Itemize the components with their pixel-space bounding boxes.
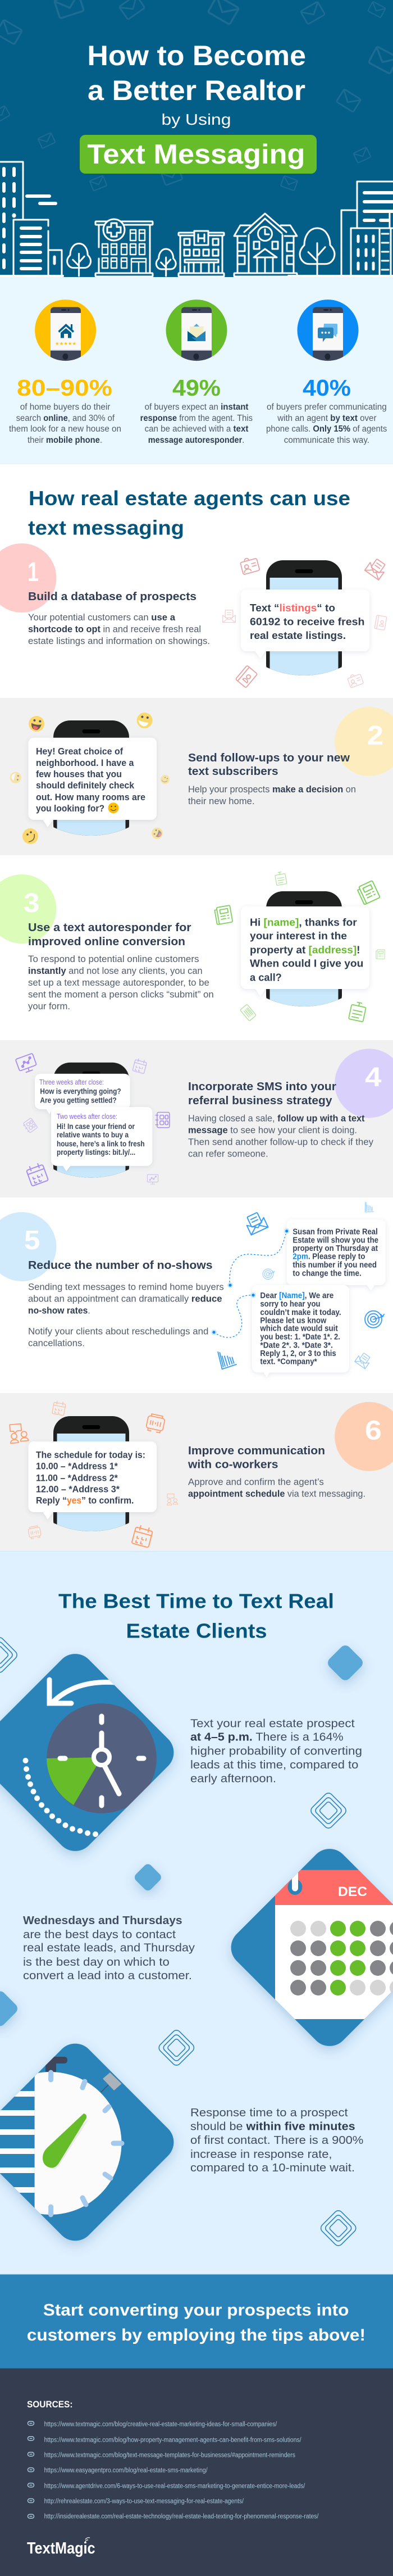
text: best hour [190, 1717, 362, 1785]
phone with message 2: few houses that you [36, 769, 122, 779]
calendar diamond: DEC [338, 1884, 367, 1899]
calendar day dots [290, 1921, 393, 1996]
text: best days: convert a lead into a customer. [23, 1969, 192, 1982]
stat 2: message autoresponder. [148, 436, 244, 445]
message bubble B: which date would suit [259, 1325, 338, 1334]
text block 1: Build a database of prospects [28, 590, 196, 603]
number badge 3: 3 [24, 888, 39, 918]
text block 5: Notify your clients about reschedulings and [28, 1327, 208, 1337]
panel: section 4 referral [0, 1040, 393, 1198]
icon: phone with envelope [166, 300, 227, 361]
phone with message 1 [241, 560, 369, 682]
phone with message 2: neighborhood. I have a [36, 758, 134, 768]
text: best days [23, 1914, 195, 1982]
phone with message 6: 10.00 – *Address 1* [36, 1461, 118, 1471]
text: best hour: leads at this time, compared to [190, 1758, 358, 1771]
text block 4: referral business strategy [188, 1094, 332, 1107]
phone with two messages: relative wants to buy a [57, 1131, 129, 1139]
phone with two messages: How is everything going? [40, 1087, 121, 1096]
stat 3: with an agent by text over [277, 414, 376, 423]
heading: how agents can use texting: How real estate agents can use [29, 487, 350, 510]
number badge 5 [0, 1212, 56, 1281]
title: How to Become [87, 40, 306, 71]
text: response time: compared to a 10-minute wait. [190, 2161, 355, 2174]
message bubble A: property on Thursday at [293, 1244, 378, 1253]
text block 2: their new home. [188, 796, 255, 806]
decoration: filled diamond centre [133, 1862, 163, 1892]
number badge 1: 1 [28, 557, 39, 587]
phone with message 3: Hi [name], thanks for [250, 917, 357, 928]
panel: best time to text [0, 1551, 393, 2274]
skyline: right buildings [289, 182, 393, 276]
text block 1: estate listings and information on showings. [28, 636, 210, 646]
stat 3: of buyers prefer communicating [267, 402, 387, 412]
phone with message 6: 12.00 – *Address 3* [36, 1485, 120, 1495]
message bubble B [250, 1285, 349, 1377]
phone with two messages [35, 1063, 152, 1184]
title badge: Text Messaging [80, 135, 317, 174]
message bubble B: Please let us know [260, 1317, 327, 1326]
text: best hour: Text your real estate prospect [190, 1717, 355, 1730]
text: best days: real estate leads, and Thursday [23, 1942, 195, 1954]
skyline: hotel [179, 231, 224, 276]
text block 6: Improve communication [188, 1444, 325, 1457]
number badge 5: 5 [24, 1226, 40, 1255]
phone with two messages: property listings: bit.ly/... [57, 1148, 135, 1157]
icons: documents [214, 871, 385, 1022]
text block 5: about an appointment can dramatically reduce [28, 1294, 222, 1304]
number badge 1 [0, 543, 56, 613]
phone with two messages: Are you getting settled? [40, 1096, 117, 1105]
phone with two messages: Hi! In case your friend or [57, 1122, 135, 1131]
message bubble B: sorry to hear you [260, 1300, 320, 1309]
stat 1: of home buyers do their [20, 402, 110, 412]
text block 6 [188, 1444, 365, 1499]
phone with message 6: The schedule for today is: [36, 1450, 145, 1460]
phone with message 2: should definitely check [36, 781, 135, 791]
text block 5: Sending text messages to remind home buyers [28, 1282, 224, 1292]
message bubble A: this number if you need [293, 1261, 377, 1270]
decoration: outlined diamond centre [157, 2029, 196, 2067]
text: response time: should be within five minutes [190, 2120, 355, 2133]
source links: https://www.textmagic.com/blog/how-property-management-agents-can-benefit-from-sms-solutions/ [44, 2437, 301, 2443]
phone with message 3: When could I give you [250, 958, 363, 969]
text: response time: increase in response rate, [190, 2148, 332, 2161]
text block 3: To respond to potential online customers [28, 954, 199, 964]
text block 3 [28, 921, 214, 1012]
title [87, 40, 306, 128]
heading: how agents can use texting: text messaging [28, 516, 184, 539]
decorative envelopes [0, 0, 393, 191]
logo: TextMagic: TextMagic [27, 2539, 95, 2557]
panel: section 2 follow-ups [0, 698, 393, 855]
phone with message 2: you looking for? [36, 804, 104, 814]
text: best days: are the best days to contact [23, 1928, 176, 1941]
text block 2 [188, 751, 356, 806]
text block 1 [28, 590, 210, 646]
phone with message 1: real estate listings. [250, 630, 346, 641]
phone with message 2: out. How many rooms are [36, 792, 145, 802]
text block 3: improved online conversion [28, 935, 185, 948]
text block 6: with co-workers [188, 1458, 278, 1471]
calendar diamond [223, 1841, 393, 2054]
panel: section 5 no-shows [0, 1198, 393, 1393]
phone with message 3 [241, 891, 369, 1013]
text block 6: appointment schedule via text messaging. [188, 1489, 365, 1499]
panel: section 6 co-workers [0, 1393, 393, 1551]
panel: sources footer [0, 2368, 393, 2576]
number badge 4: 4 [365, 1063, 382, 1092]
text block 2: Send follow-ups to your new [188, 751, 350, 764]
panel: header [0, 0, 393, 278]
phone with message 1: 60192 to receive fresh [250, 616, 365, 628]
text: response time: of first contact. There is a 900% [190, 2134, 363, 2147]
panel: section 3 autoresponder [0, 855, 393, 1040]
text block 5 [28, 1259, 224, 1349]
icon: phone with house: ★★★★★ [55, 341, 76, 346]
decoration: outlined diamond bottom [319, 2209, 358, 2247]
stat 2: can be achieved with a text [145, 424, 248, 434]
source links: https://www.textmagic.com/blog/text-message-templates-for-businesses/#appointment-reminders [44, 2452, 295, 2459]
icons: contact cards and envelopes [223, 556, 388, 688]
message bubble A: Susan from Private Real [293, 1228, 378, 1237]
message bubble B: you best: 1. *Date 1*. 2. [260, 1333, 340, 1342]
title: by Using [162, 111, 231, 128]
stat 2: response from the agent. This [140, 414, 253, 423]
text block 3: your form. [28, 1001, 70, 1012]
text block 2: text subscribers [188, 765, 278, 778]
stat 1: 80–90% [17, 375, 112, 401]
phone with two messages: Three weeks after close: [39, 1078, 104, 1086]
text block 3: set up a text message autoresponder, to be [28, 978, 209, 988]
message bubble A: Estate will show you the [293, 1236, 378, 1245]
source links: https://www.textmagic.com/blog/creative-real-estate-marketing-ideas-for-small-companies/ [44, 2421, 277, 2428]
number badge 4 [335, 1049, 393, 1118]
text block 4: Then send another follow-up to check if they [188, 1137, 374, 1148]
phone with two messages: Two weeks after close: [57, 1113, 117, 1121]
icons: planners and charts [16, 1053, 170, 1186]
stat 3 [266, 375, 387, 445]
icon: arrow [49, 1680, 115, 1703]
heading: best time: The Best Time to Text Real [58, 1590, 334, 1613]
phone with message 3: property at [address] ! [250, 945, 360, 956]
source links [28, 2421, 319, 2520]
panel: call to action: customers by employing the tips above! [27, 2326, 365, 2344]
message bubble A [284, 1219, 386, 1291]
phone with message 3: your interest in the [250, 931, 347, 942]
skyline: school [234, 214, 297, 276]
number badge 2: 2 [367, 721, 383, 751]
phone with message 6: 11.00 – *Address 2* [36, 1473, 118, 1484]
source links: https://www.easyagentpro.com/blog/real-estate-sms-marketing/ [44, 2467, 208, 2474]
decoration: filled diamond left edge [0, 1989, 20, 2028]
source links: http://rehrealestate.com/3-ways-to-use-text-messaging-for-real-estate-agents/ [44, 2498, 244, 2505]
source links: http://insiderealestate.com/real-estate-technology/real-estate-lead-texting-for-phenomenal-response-rates/ [44, 2513, 319, 2520]
phone with message 2 [28, 720, 157, 842]
text block 5: cancellations. [28, 1339, 85, 1349]
stat 2 [140, 375, 253, 445]
icons: emoji [9, 711, 171, 844]
panel: section 1 database [0, 464, 393, 698]
text block 4: Having closed a sale, follow up with a text [188, 1114, 365, 1124]
stat 2: of buyers expect an instant [145, 402, 248, 412]
number badge 2 [335, 707, 393, 776]
skyline: hospital [95, 219, 153, 276]
text block 4: message to see how your client is doing. [188, 1126, 357, 1136]
text block 4: Incorporate SMS into your [188, 1080, 336, 1093]
stat 1: them look for a new house on [9, 424, 121, 434]
icon: phone with chat bubbles [298, 300, 358, 361]
message bubble A: to change the time. [293, 1269, 362, 1278]
number badge 3 [0, 874, 56, 944]
phone with message 3: a call? [250, 972, 282, 983]
source links: https://www.agentdrive.com/6-ways-to-use-real-estate-sms-marketing-to-generate-entice-more-leads/ [44, 2483, 305, 2489]
text block 5: Reduce the number of no-shows [28, 1259, 213, 1272]
phone with two messages: house, here’s a link to fresh [57, 1140, 145, 1148]
phone with message 6 [28, 1416, 157, 1538]
stat 3: phone calls. Only 15% of agents [266, 424, 387, 434]
skyline: tree 2 [156, 249, 176, 276]
sources heading: SOURCES: [27, 2400, 73, 2410]
stat 1: their mobile phone. [28, 436, 102, 445]
panel: call to action [0, 2274, 393, 2368]
number badge 6: 6 [365, 1416, 382, 1446]
skyline: tree 3 [300, 228, 335, 276]
text block 1: Your potential customers can use a [28, 613, 176, 623]
panel: call to action: Start converting your prospects into [43, 2301, 349, 2320]
stat 1 [9, 375, 121, 445]
phone with message 6: Reply “yes” to confirm. [36, 1496, 134, 1506]
message bubble B: couldn’t make it today. [260, 1308, 341, 1317]
text block 3: instantly and not lose any clients, you can [28, 966, 203, 976]
title badge: Text Messaging: Text Messaging [87, 139, 305, 170]
title: a Better Realtor [88, 75, 305, 106]
message bubble B: Reply 1, 2, or 3 to this [260, 1349, 336, 1358]
panel: statistics [0, 277, 393, 464]
dashed connectors [217, 1234, 286, 1337]
stat 3: 40% [303, 375, 351, 401]
phone with message 2: Hey! Great choice of [36, 747, 123, 757]
text block 3: sent the moment a person clicks “submit” on [28, 990, 214, 1000]
text block 6: Approve and confirm the agent’s [188, 1477, 324, 1487]
stat 1: search online, and 30% of [16, 414, 115, 423]
decoration: outlined diamond left [0, 1636, 19, 1674]
clock diamond [0, 1646, 182, 1859]
heading: how agents can use texting [28, 487, 350, 539]
decoration: outlined diamond [309, 1792, 348, 1830]
connector dots [211, 1228, 290, 1335]
text: best days: is the best day on which to [23, 1956, 170, 1969]
heading: best time [58, 1590, 334, 1642]
icons: envelopes, targets, charts [218, 1202, 384, 1369]
text: response time [190, 2106, 363, 2174]
decoration: filled diamond right [326, 1643, 365, 1682]
text: best hour: early afternoon. [190, 1772, 276, 1785]
heading: best time: Estate Clients [126, 1619, 267, 1642]
stat 2: 49% [172, 375, 221, 401]
skyline: left buildings [0, 162, 63, 276]
text block 4: can refer someone. [188, 1149, 268, 1159]
message bubble A: 2pm. Please reply to [293, 1253, 365, 1262]
text block 5: no-show rates. [28, 1306, 90, 1316]
message bubble B: text. *Company* [260, 1358, 317, 1367]
text block 3: Use a text autoresponder for [28, 921, 191, 934]
icons: clocks, calendars, people [9, 1400, 178, 1548]
text block 4 [188, 1080, 374, 1159]
message bubble B: *Date 2*. 3. *Date 3*. [260, 1341, 333, 1350]
text block 2: Help your prospects make a decision on [188, 784, 356, 795]
text block 1: shortcode to opt in and receive fresh real [28, 624, 201, 634]
icon: phone with house [35, 300, 97, 361]
message bubble B: Dear [Name], We are [260, 1291, 333, 1300]
text: response time: Response time to a prospect [190, 2106, 348, 2119]
stopwatch diamond [0, 2035, 182, 2249]
text: best days: Wednesdays and Thursdays [23, 1914, 182, 1927]
skyline: tree 1 [67, 243, 91, 276]
text: best hour: higher probability of converting [190, 1744, 362, 1757]
text: best hour: at 4–5 p.m. There is a 164% [190, 1730, 344, 1743]
phone with message 1: Text “listings“ to [250, 602, 335, 614]
number badge 6 [335, 1402, 393, 1471]
stat 3: communicate this way. [284, 436, 369, 445]
